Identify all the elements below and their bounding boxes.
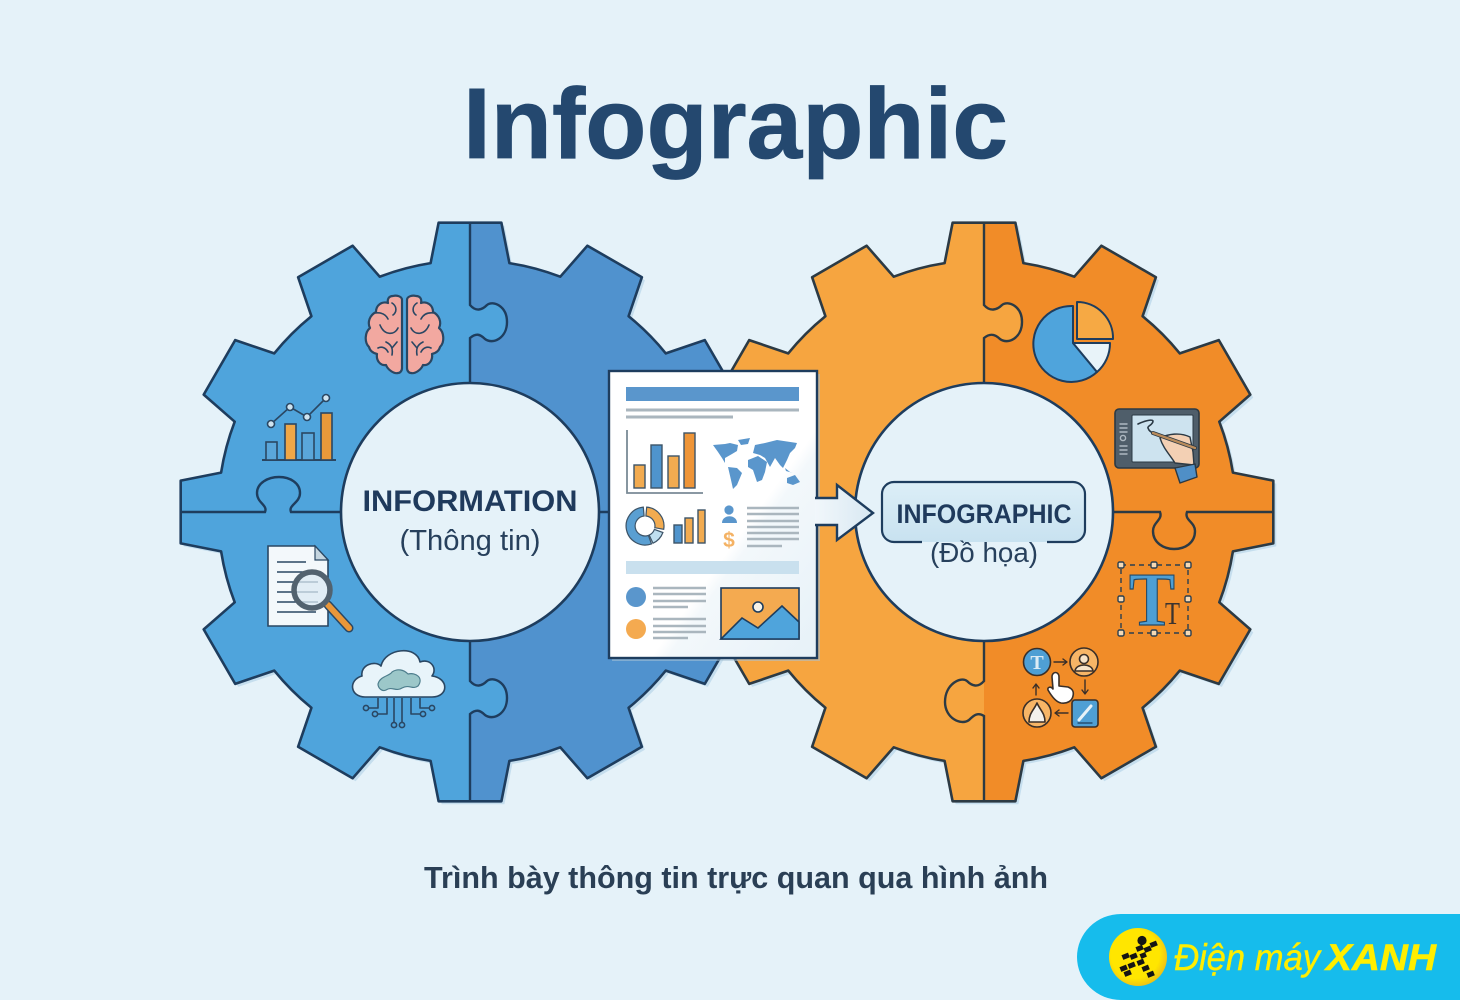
- title: Infographic: [463, 68, 1008, 180]
- label: infographic: [882, 482, 1085, 568]
- label: infographic: (Đồ họa): [930, 537, 1038, 568]
- world map: [713, 438, 800, 489]
- infographic document: [609, 371, 820, 661]
- arrow to infographic: [815, 485, 873, 540]
- gear outline: [695, 223, 1273, 801]
- bullet dots and lines: [626, 587, 706, 639]
- icon: cloud with circuit: [353, 651, 445, 728]
- picture thumbnail: [721, 588, 799, 639]
- bar chart: [627, 430, 703, 493]
- icon: drawing tablet with hand: [1115, 409, 1199, 483]
- small bar chart: [674, 510, 705, 543]
- subtitle: Trình bày thông tin trực quan qua hình ảnh: [424, 860, 1048, 895]
- label: information: (Thông tin): [400, 525, 540, 557]
- person and dollar symbol: [722, 505, 737, 552]
- label: information: INFORMATION: [362, 485, 578, 518]
- donut chart: [626, 507, 664, 545]
- label: information: [362, 485, 578, 557]
- logo mark: [1109, 928, 1167, 986]
- gear: information: [179, 221, 724, 804]
- icon: document with magnifier: [268, 546, 349, 628]
- logo badge: XANH: [1324, 937, 1437, 978]
- logo wordmark: Điện máy: [1174, 937, 1322, 978]
- gear: infographic: [730, 221, 1276, 804]
- centre hole: [341, 383, 599, 641]
- icon: brain: [366, 296, 443, 373]
- label: infographic: INFOGRAPHIC: [896, 499, 1072, 529]
- person and dollar symbol: $: [723, 529, 735, 552]
- icon: text styling TT: [1118, 558, 1191, 642]
- gear right half, darker puzzle piece: [471, 224, 720, 800]
- logo badge: [1077, 914, 1460, 1000]
- icon: text styling TT: T: [1129, 558, 1175, 642]
- icon: bar and line chart: [262, 394, 336, 460]
- text lines: [626, 410, 799, 417]
- header bar: [626, 387, 799, 401]
- section band: [626, 561, 799, 574]
- centre hole: [855, 383, 1113, 641]
- text lines: [747, 508, 799, 546]
- gear right half, darker puzzle piece: [984, 224, 1272, 800]
- icon: pie chart: [1033, 302, 1113, 382]
- icon: interaction flow: [1023, 648, 1098, 727]
- seams and puzzle joints: [182, 222, 612, 802]
- icon: text styling TT: T: [1165, 595, 1180, 631]
- icon: interaction flow: T: [1030, 652, 1044, 674]
- gear outline: [181, 223, 759, 801]
- seams and puzzle joints: [945, 222, 1272, 802]
